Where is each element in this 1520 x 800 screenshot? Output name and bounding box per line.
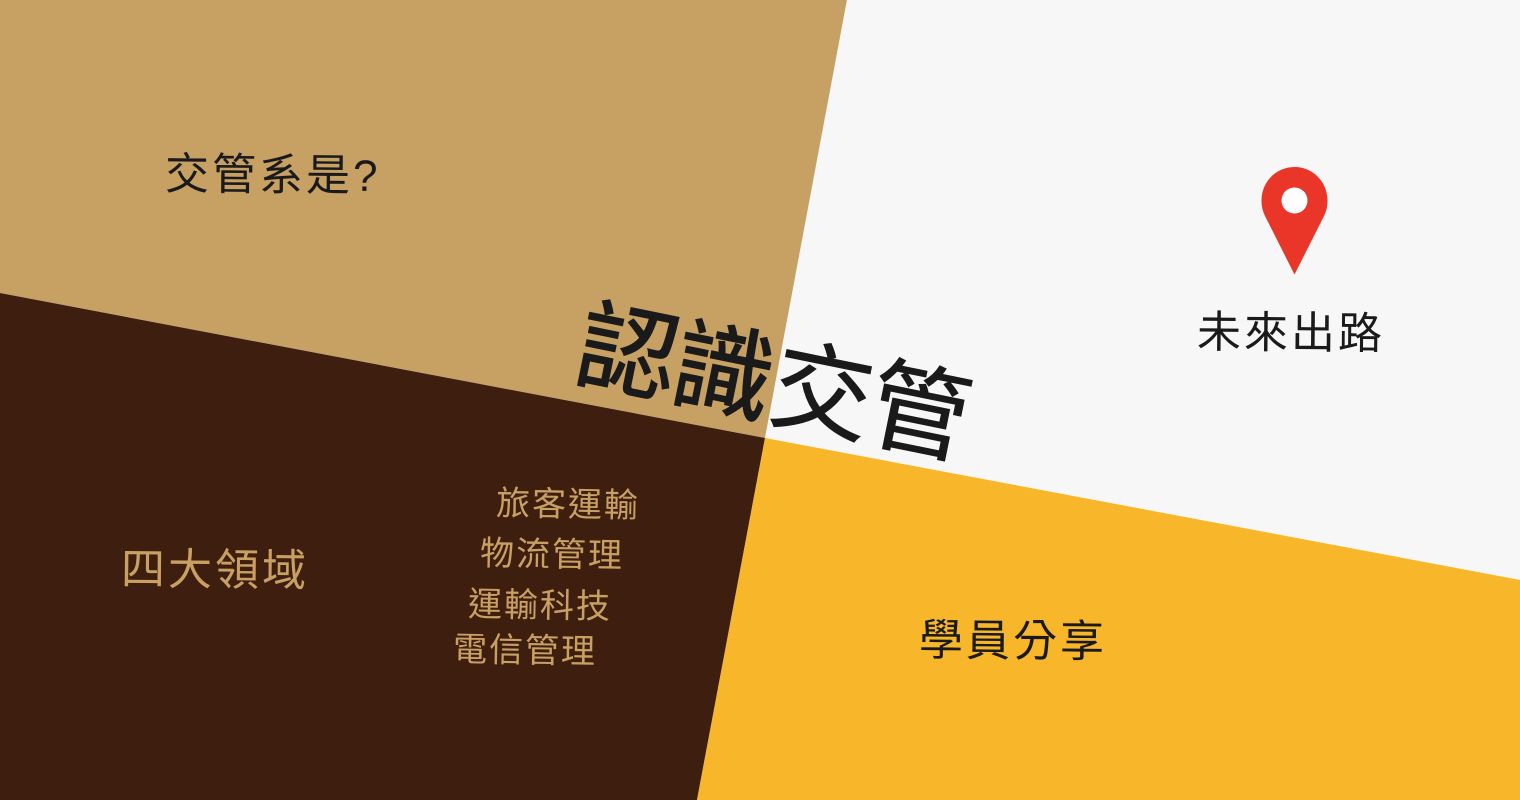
- panel: top-left tan: [0, 0, 847, 438]
- icon: map pin: [1262, 167, 1328, 274]
- heading: what is the department: 交管系是?: [165, 150, 381, 201]
- list item: telecom management: 電信管理: [453, 631, 597, 671]
- heading: student sharing: 學員分享: [919, 616, 1107, 667]
- main title: 認識交管: [568, 289, 978, 478]
- list item: passenger transport: 旅客運輸: [496, 485, 640, 525]
- heading: four fields: 四大領域: [121, 545, 309, 596]
- list item: logistics: 物流管理: [480, 535, 624, 575]
- panel: bottom-right yellow: [697, 438, 1520, 800]
- list: fields: [453, 485, 640, 671]
- list item: transport technology: 運輸科技: [468, 586, 612, 626]
- panel: top-right white: [765, 0, 1520, 580]
- panel: bottom-left brown: [0, 293, 765, 800]
- heading: future careers: 未來出路: [1197, 308, 1385, 359]
